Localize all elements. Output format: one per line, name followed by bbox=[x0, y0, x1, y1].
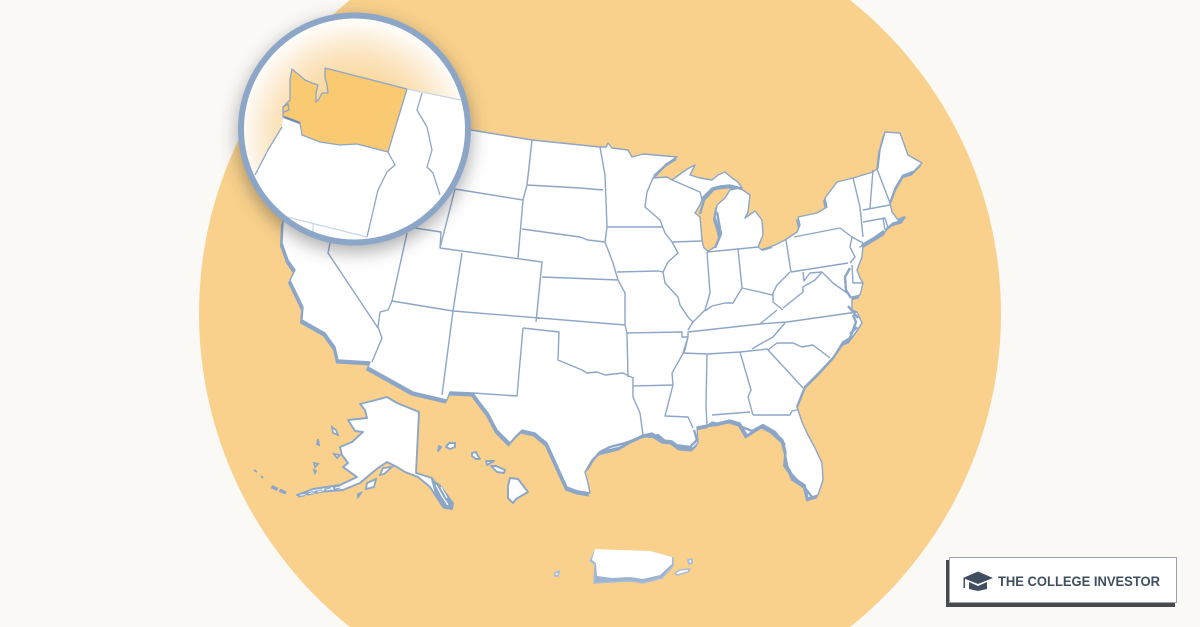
lens ring bbox=[241, 16, 468, 242]
Alaska panhandle islands bbox=[432, 480, 453, 509]
lens: state borders bbox=[255, 93, 440, 237]
lens: Washington highlighted bbox=[283, 68, 407, 152]
background circle bbox=[199, 0, 1001, 627]
lens: Oregon, Idaho and Montana bbox=[254, 90, 465, 240]
icon: graduation cap bbox=[963, 572, 993, 591]
logo wordmark: THE COLLEGE INVESTOR bbox=[998, 573, 1160, 589]
logo shadow bbox=[946, 560, 1175, 607]
lens interior bbox=[244, 18, 465, 240]
map: Hawaii bbox=[438, 443, 528, 503]
logo: The College Investor bbox=[946, 558, 1176, 607]
map: contiguous states bbox=[280, 115, 922, 501]
lens shadow bbox=[238, 18, 472, 252]
map: Puerto Rico bbox=[555, 549, 692, 583]
Aleutian chain bbox=[270, 486, 340, 496]
logo box bbox=[950, 558, 1176, 602]
map: Alaska bbox=[254, 397, 453, 509]
magnifier lens showing Washington bbox=[230, 16, 480, 260]
map of the United States bbox=[254, 115, 922, 583]
